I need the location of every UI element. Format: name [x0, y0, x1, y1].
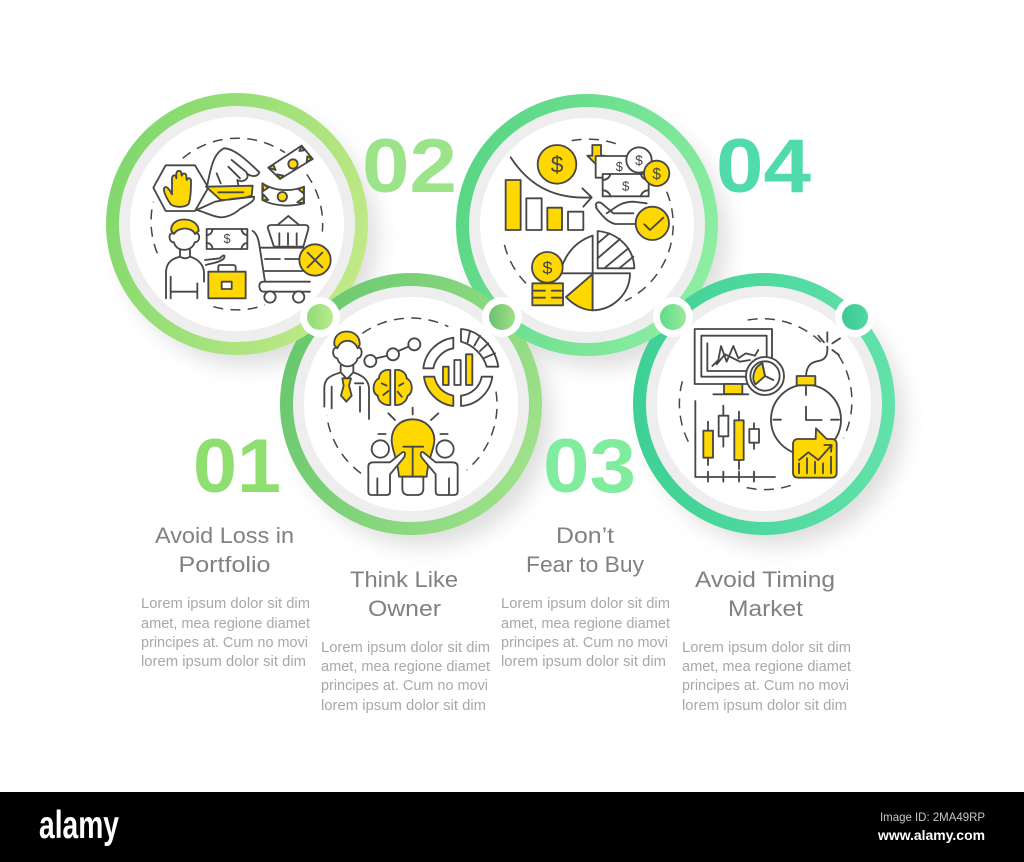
text block: avoid loss in portfolio: Avoid Loss in	[155, 523, 294, 548]
icon: monitor with chart	[695, 329, 772, 394]
icon group: avoid timing market	[679, 319, 852, 490]
text block: avoid timing market: Market	[728, 596, 804, 621]
icon: connected dots	[364, 338, 420, 367]
footer url: www.alamy.com	[877, 827, 985, 843]
icon: idea lines	[378, 408, 448, 434]
connector dot 1	[300, 297, 340, 337]
text block: avoid timing market: principes at. Cum no movi	[682, 678, 849, 694]
icon: man with briefcase	[166, 219, 246, 298]
ring: circle 2	[280, 273, 542, 535]
text block: think like owner: amet, mea regione diamet	[321, 659, 490, 675]
connector dot 2	[482, 297, 522, 337]
icon: coin stack: $	[542, 258, 552, 278]
number 01: 01	[193, 424, 281, 509]
icon: falling money	[587, 145, 669, 196]
icon: wall clock	[746, 357, 784, 395]
number 03: 03	[543, 424, 636, 509]
icon: shopping cart with cross	[253, 216, 331, 303]
icon: pie chart	[561, 231, 634, 310]
footer logo: alamy	[39, 804, 119, 847]
ring: circle 1	[106, 93, 368, 355]
icon: stop hand	[153, 165, 208, 211]
icon: light bulb with people	[368, 419, 458, 495]
text block: don't fear to buy: amet, mea regione diamet	[501, 616, 670, 632]
text block: don't fear to buy: lorem ipsum dolor sit dim	[501, 654, 666, 670]
text block: don't fear to buy: Fear to Buy	[526, 552, 645, 577]
icon: donut chart with bars	[423, 329, 498, 406]
icon: brain	[374, 370, 412, 405]
icon: falling bills	[262, 146, 313, 206]
text block: don't fear to buy: Don’t	[556, 523, 615, 548]
icon group: think like owner	[324, 318, 498, 495]
icon: falling money: $	[635, 152, 643, 168]
text block: avoid loss in portfolio	[141, 523, 310, 670]
icon: banknote: $	[223, 232, 231, 246]
footer image id: Image ID: 2MA49RP	[880, 810, 985, 824]
icon: coin stack	[532, 252, 563, 305]
text block: avoid loss in portfolio: Portfolio	[178, 552, 270, 577]
text block: don't fear to buy: Lorem ipsum dolor sit dim	[501, 596, 670, 612]
icon group: avoid loss in portfolio	[151, 138, 331, 310]
text block: avoid timing market	[682, 567, 851, 714]
connector dot 3	[653, 297, 693, 337]
text block: think like owner: Think Like	[350, 567, 458, 592]
icon: hand with check	[596, 202, 669, 240]
text block: avoid loss in portfolio: lorem ipsum dolor sit dim	[141, 654, 306, 670]
icon group: don't fear to buy	[503, 139, 673, 310]
text block: think like owner: principes at. Cum no movi	[321, 678, 488, 694]
text block: avoid loss in portfolio: principes at. Cum no movi	[141, 635, 308, 651]
icon: falling money: $	[616, 160, 623, 174]
text block: think like owner: Owner	[368, 596, 442, 621]
icon: hands with money	[197, 148, 259, 217]
footer bar	[0, 792, 1024, 862]
text block: avoid timing market: Lorem ipsum dolor sit dim	[682, 640, 851, 656]
text block: avoid loss in portfolio: Lorem ipsum dolor sit dim	[141, 596, 310, 612]
text block: avoid timing market: amet, mea regione diamet	[682, 659, 851, 675]
ring: circle 3	[456, 94, 718, 356]
icon: falling money: $	[622, 178, 630, 193]
icon: candlestick chart	[695, 401, 775, 482]
text block: think like owner: Lorem ipsum dolor sit dim	[321, 640, 490, 656]
text block: avoid timing market: lorem ipsum dolor sit dim	[682, 698, 847, 714]
soft shadows	[121, 110, 904, 546]
interlace: circle 2 over circle 3	[434, 276, 491, 334]
icon: businessman	[324, 331, 369, 419]
text block: don't fear to buy	[501, 523, 670, 670]
icon: time bomb	[771, 332, 841, 455]
text block: avoid timing market: Avoid Timing	[695, 567, 835, 592]
icon: dollar coin	[538, 145, 576, 184]
text block: avoid loss in portfolio: amet, mea regione diamet	[141, 616, 310, 632]
number 04: 04	[716, 124, 811, 209]
number 02: 02	[362, 124, 457, 209]
connector dot 4	[835, 297, 875, 337]
ring: circle 4	[633, 273, 895, 535]
interlace: circle 3 over circle 4	[596, 289, 662, 356]
icon: growth chart bubble	[793, 428, 837, 478]
icon: banknote	[207, 229, 247, 249]
text block: think like owner: lorem ipsum dolor sit dim	[321, 698, 486, 714]
icon: falling bar chart	[506, 157, 592, 230]
text block: think like owner	[321, 567, 490, 714]
interlace: circle 1 over circle 2	[246, 289, 310, 355]
icon: dollar coin: $	[551, 151, 564, 177]
icon: falling money: $	[652, 166, 661, 183]
text block: don't fear to buy: principes at. Cum no movi	[501, 635, 668, 651]
